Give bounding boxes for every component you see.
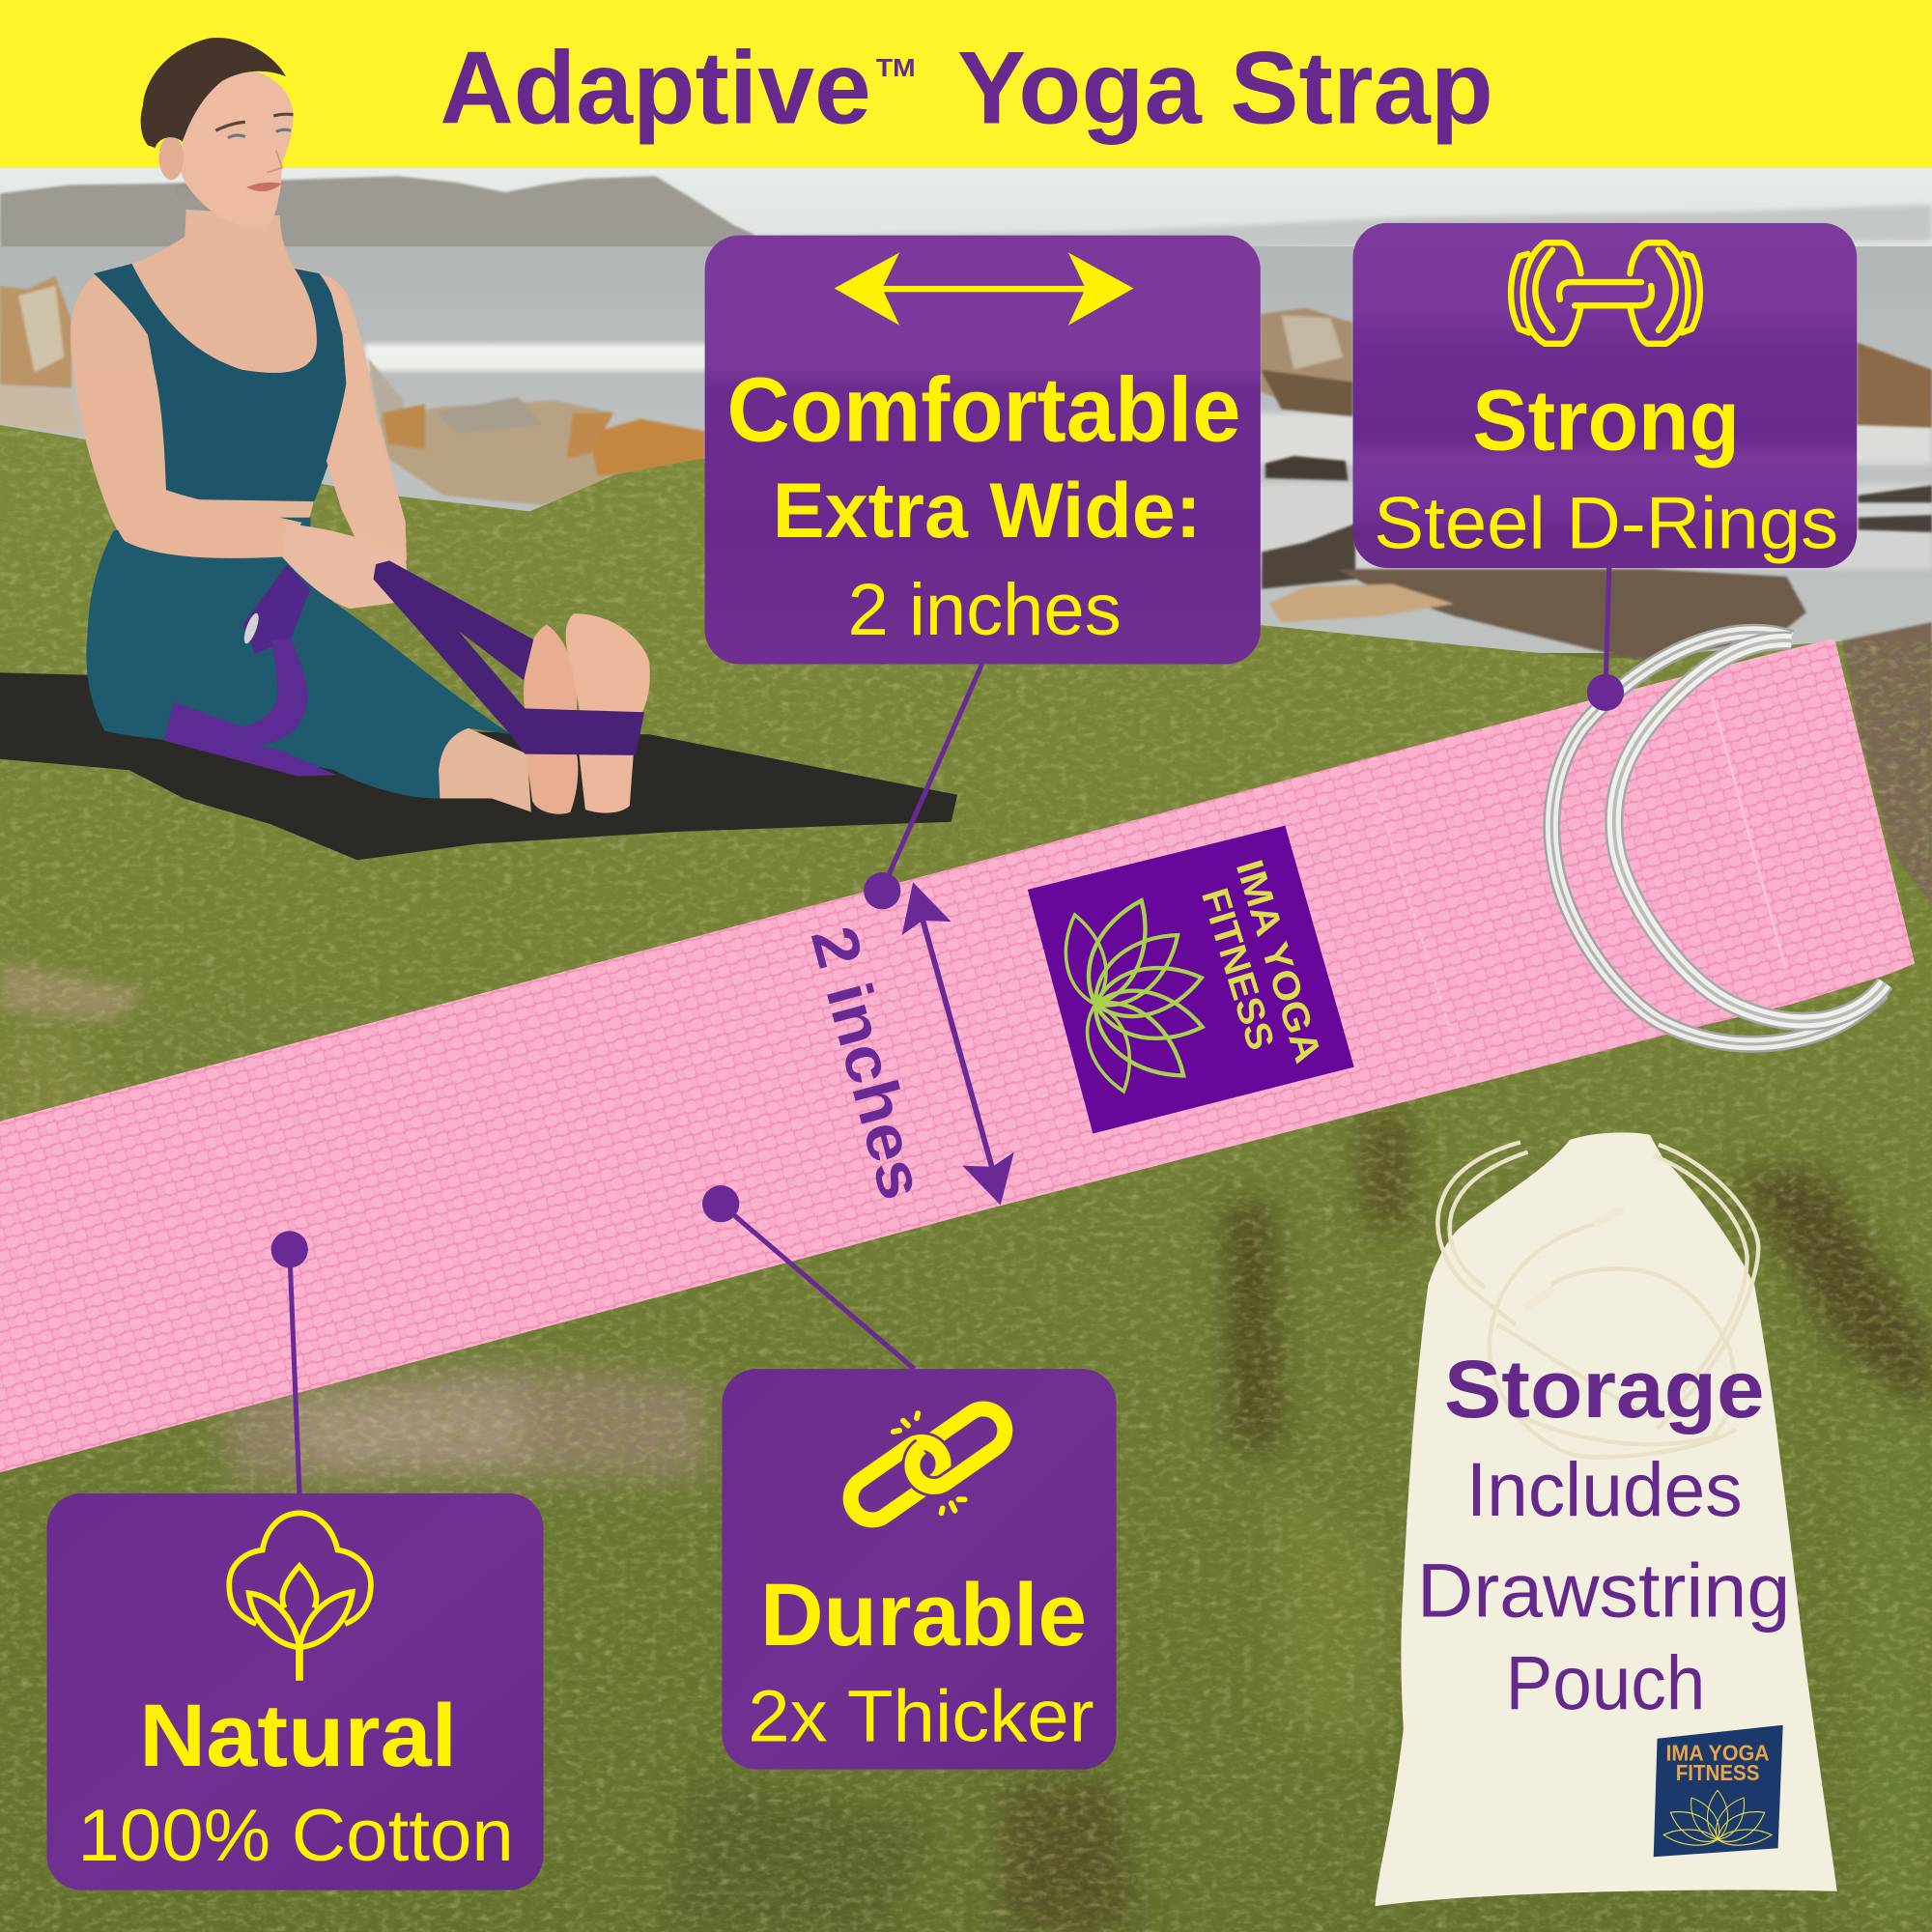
drawstring knots [1528,1210,1620,1306]
yellow title banner [0,0,1932,167]
pouch navy label: IMA YOGA [1665,1741,1770,1766]
heading: Durable [760,1566,1087,1664]
woman: far arm [327,280,407,560]
woman: tank top [94,264,346,501]
panel: strong [1353,223,1857,568]
icon: chain link [842,1401,1013,1528]
2 inches rotated label: 2 inches [797,920,938,1207]
pouch text line 2: Drawstring [1417,1547,1790,1633]
strap loop around feet [373,560,644,755]
heading: Comfortable [727,360,1240,462]
pouch navy label [1654,1725,1783,1857]
woman: feet [524,613,650,814]
heading: Strong [1472,372,1740,469]
yoga mat [0,672,957,860]
woman: face [182,71,294,227]
label text line 2: FITNESS [1193,884,1282,1055]
leader: comfortable [864,665,982,909]
subheading: Extra Wide: [773,468,1202,554]
2 inch measurement arrow [902,882,1014,1205]
small D-ring [242,611,262,645]
icon: double arrow [835,252,1133,326]
leader: strong [1587,567,1624,711]
pouch body [1375,1132,1837,1906]
drawstring pouch [1375,1132,1837,1906]
pouch navy label: FITNESS [1676,1760,1759,1785]
drawstrings [1437,1142,1758,1457]
woman: forearm [76,370,301,558]
leader: durable [702,1185,914,1369]
title continued: Yoga Strap [957,30,1493,146]
strap woven label [1028,826,1354,1133]
heading: Natural [139,1687,457,1785]
detail: 2x Thicker [748,1675,1094,1757]
icon: cotton [229,1513,371,1681]
detail: 100% Cotton [77,1795,514,1877]
label text: IMA YOGA [1228,855,1329,1067]
lotus logo [1056,891,1208,1097]
icon: dumbbell [1511,242,1700,344]
woman: hands [282,524,407,609]
woman seated with purple strap [71,38,650,814]
steel D-rings [1551,633,1886,1044]
pouch heading: Storage [1444,1344,1765,1435]
woman: neck, chest and upper arm skin [71,210,407,542]
title: Adaptive [440,30,871,146]
woman: ear [159,135,184,180]
strap buckle section [242,564,310,654]
leader: natural [271,1231,308,1493]
woman: ankle [439,728,531,812]
panel: natural [46,1493,544,1890]
panel: comfortable extra wide [705,236,1261,665]
detail: Steel D-Rings [1374,483,1838,565]
strap hanging tail [164,639,336,777]
pouch text line 1: Includes [1466,1446,1743,1532]
woman: hair [141,38,286,148]
woman: facial features [176,114,294,197]
pink strap body [0,639,1915,1472]
pouch text line 3: Pouch [1506,1639,1705,1725]
trademark: TM [876,55,916,82]
woman: leggings [86,518,511,799]
detail: 2 inches [848,569,1122,651]
panel: durable [722,1369,1117,1770]
